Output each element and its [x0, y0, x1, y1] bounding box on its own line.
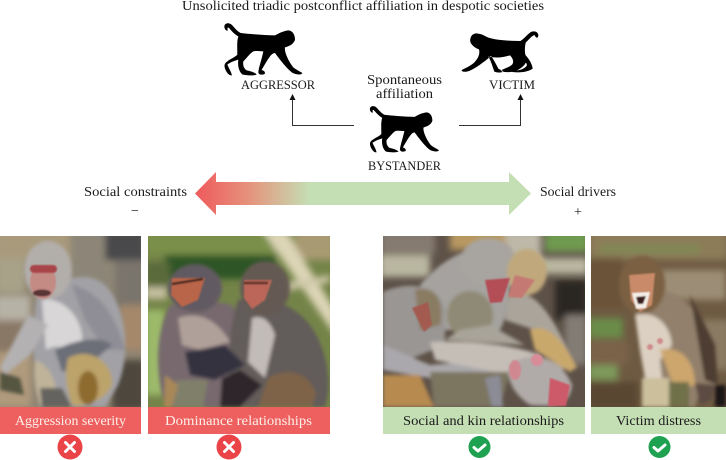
- photo: social and kin relationships: [380, 230, 589, 407]
- spontaneous affiliation label: Spontaneous: [367, 73, 442, 88]
- icon: check: [648, 436, 670, 458]
- icon: victim monkey: [462, 31, 538, 73]
- icon: check: [468, 436, 490, 458]
- label: aggression severity: [0, 407, 141, 434]
- social constraints label: −: [131, 204, 139, 219]
- social drivers label: [540, 185, 616, 220]
- label: social and kin relationships: [383, 407, 585, 434]
- social constraints label: [84, 185, 187, 219]
- icon: bystander monkey: [370, 106, 439, 152]
- social drivers label: Social drivers: [540, 185, 616, 200]
- label: social and kin relationships: Social and kin relationships: [403, 414, 564, 429]
- photo: dominance relationships: [145, 230, 335, 407]
- social constraints label: Social constraints: [84, 185, 187, 200]
- aggressor label: AGGRESSOR: [241, 77, 315, 92]
- social drivers label: +: [574, 205, 582, 220]
- bystander label: BYSTANDER: [368, 158, 441, 173]
- spontaneous affiliation label: [367, 73, 442, 102]
- icon: cross: [58, 434, 82, 460]
- double arrow: constraints to drivers: [195, 172, 531, 215]
- label: dominance relationships: Dominance relationships: [165, 414, 312, 429]
- spontaneous affiliation label: affiliation: [376, 87, 433, 102]
- arrow: bystander to victim: [459, 94, 524, 126]
- label: victim distress: [591, 407, 726, 434]
- arrow: bystander to aggressor: [290, 94, 354, 126]
- photo: victim distress: [588, 230, 726, 410]
- label: dominance relationships: [148, 407, 330, 434]
- photo: aggression severity: [0, 230, 145, 410]
- icon: cross: [216, 434, 242, 460]
- label: victim distress: Victim distress: [616, 414, 701, 429]
- victim label: VICTIM: [489, 77, 535, 92]
- icon: aggressor monkey: [224, 23, 302, 75]
- label: aggression severity: Aggression severity: [15, 414, 126, 429]
